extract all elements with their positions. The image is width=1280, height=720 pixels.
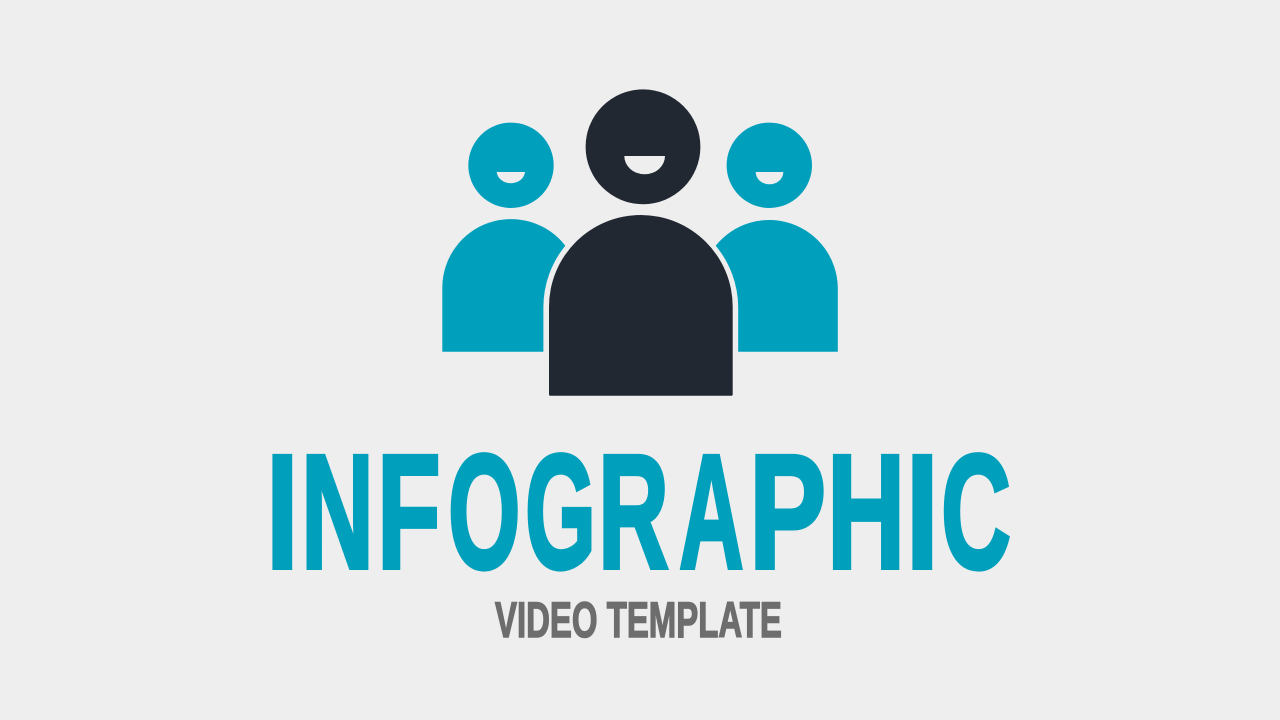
icon: centre person — [549, 89, 733, 396]
icon: left person — [442, 123, 565, 352]
title: H — [827, 420, 905, 603]
title: I — [266, 420, 298, 603]
title: G — [525, 420, 596, 603]
icon: right person — [716, 123, 838, 352]
title: N — [301, 420, 374, 603]
title: A — [678, 420, 743, 603]
title: P — [749, 420, 826, 603]
title — [266, 420, 1011, 603]
title: C — [941, 420, 1011, 603]
subtitle: VIDEO TEMPLATE — [495, 592, 782, 648]
title: F — [377, 420, 440, 603]
title: O — [448, 420, 520, 603]
title: I — [906, 420, 938, 603]
title: R — [598, 420, 669, 603]
